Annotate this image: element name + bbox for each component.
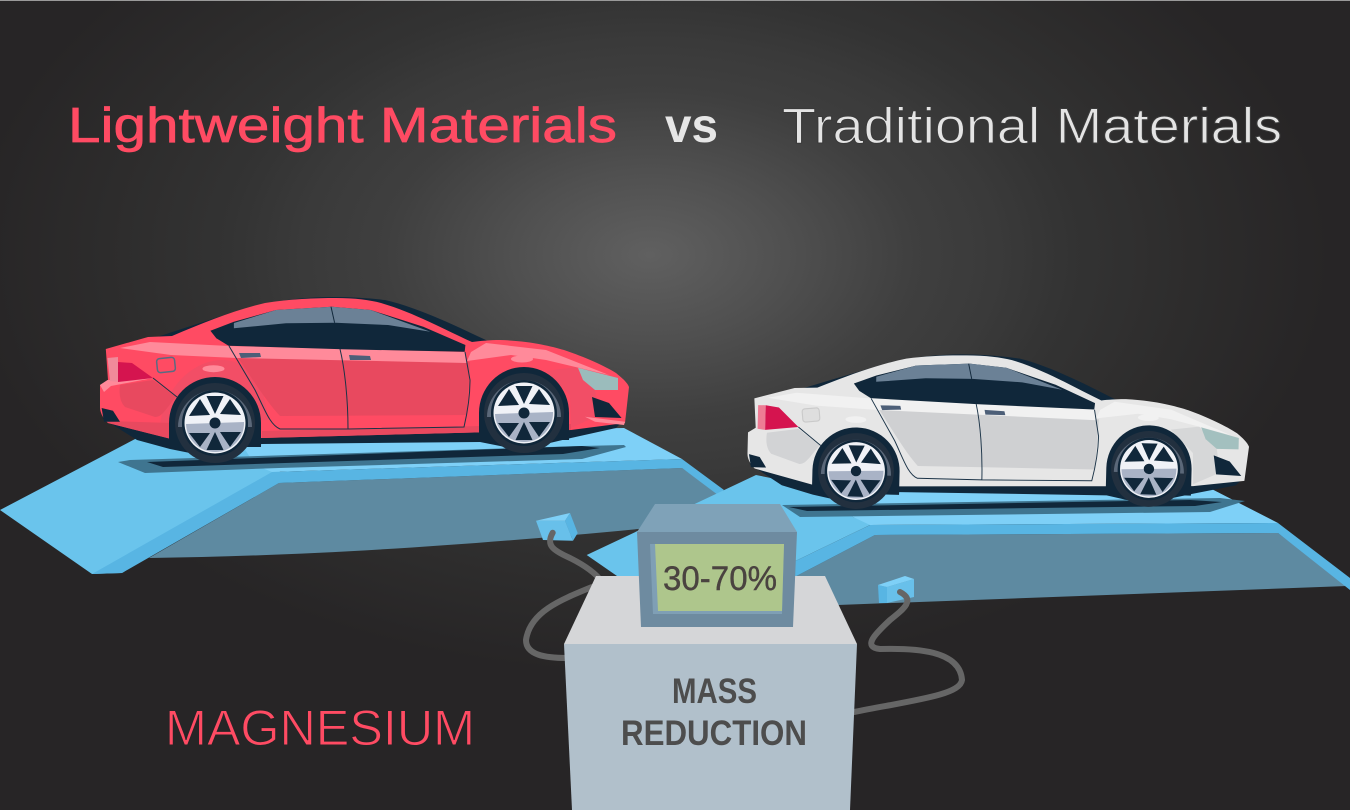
title: Traditional Materials: Traditional Materials (782, 98, 1282, 154)
left plug and cable (526, 513, 602, 658)
windows (853, 361, 1096, 409)
mass reduction machine (564, 504, 857, 810)
car body (100, 298, 629, 439)
title: Lightweight Materials: Lightweight Materials (68, 99, 617, 153)
door lines and fuel cap (153, 346, 470, 429)
car body (747, 350, 1251, 496)
title: vs: vs (665, 100, 718, 153)
label: reduction: REDUCTION (621, 714, 807, 753)
door lines and fuel cap (797, 397, 1099, 483)
headlight and grilles (1201, 427, 1239, 449)
label: mass: MASS (672, 672, 757, 711)
red car (100, 297, 629, 463)
right plug and cable (854, 576, 962, 712)
wheels (812, 417, 1193, 502)
wheels (169, 367, 569, 447)
monitor lid (637, 504, 797, 532)
machine base top (564, 576, 857, 644)
monitor screen (655, 544, 784, 611)
white car (746, 349, 1251, 519)
tail light (758, 405, 766, 430)
monitor screen shadow (650, 544, 784, 614)
percentage value: 30-70% (663, 560, 777, 598)
tail light (108, 357, 118, 382)
monitor front (637, 532, 797, 627)
windows (210, 307, 465, 352)
machine base front (564, 644, 857, 810)
headlight and grilles (578, 368, 618, 390)
label: magnesium: MAGNESIUM (165, 700, 475, 756)
left platform (0, 428, 724, 574)
right platform (587, 475, 1350, 606)
